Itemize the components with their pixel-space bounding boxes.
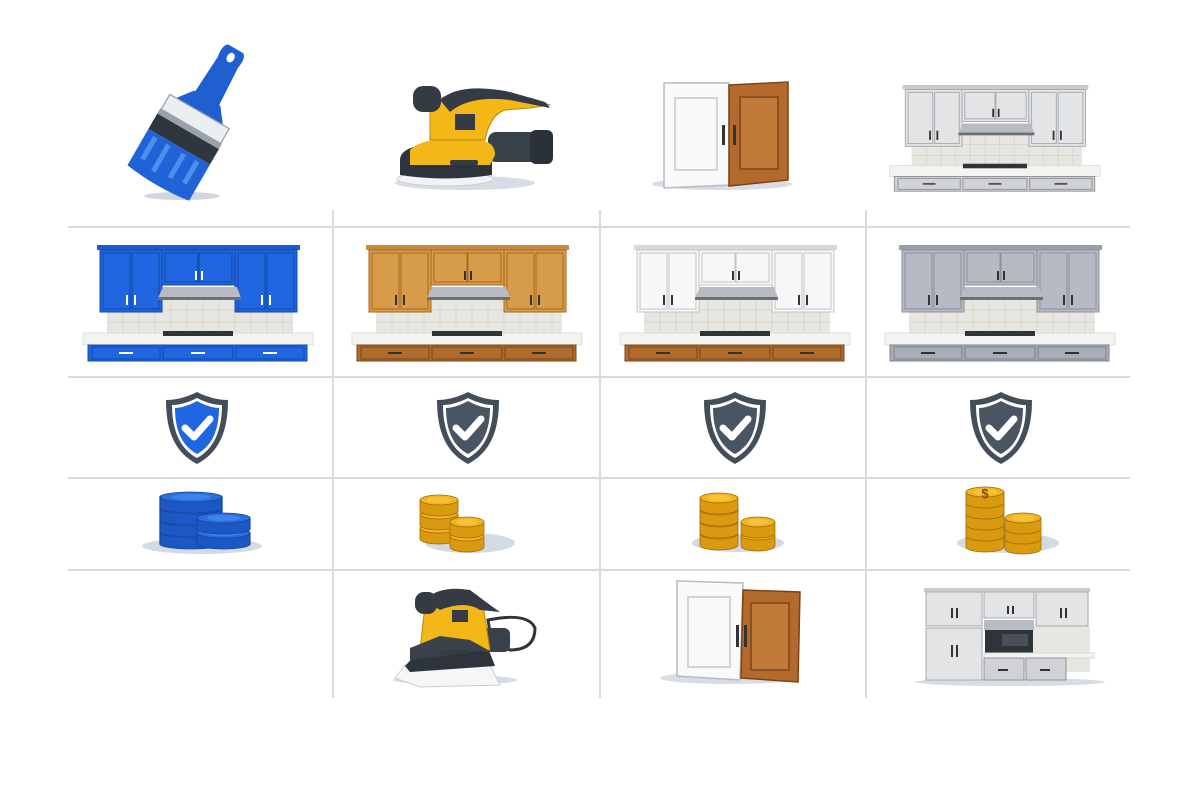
- coins: blue: [142, 492, 262, 554]
- icon: detail sander: [393, 589, 535, 687]
- icon: cabinet doors bottom: [660, 581, 800, 684]
- coins: large gold with dollar: [957, 486, 1059, 554]
- icon: orbital sander: [395, 86, 553, 190]
- icon: shield 4: [970, 392, 1032, 464]
- icon: shield 1: [166, 392, 228, 464]
- coins: small gold: [420, 495, 515, 553]
- coins: large gold with dollar: $: [981, 486, 989, 501]
- kitchen: white with wood base: [620, 245, 850, 361]
- icon: grey kitchen with oven: [915, 588, 1105, 686]
- kitchen: wood: [352, 245, 582, 361]
- kitchen: grey: [885, 245, 1115, 361]
- kitchen: blue: [83, 245, 313, 361]
- icon: cabinet doors: [652, 82, 792, 190]
- icon: shield 2: [437, 392, 499, 464]
- icon: grey kitchen top: [890, 85, 1100, 191]
- grid lines: [68, 210, 1130, 698]
- coins: medium gold: [692, 493, 784, 552]
- icon: paint brush: [126, 31, 267, 203]
- icon: shield 3: [704, 392, 766, 464]
